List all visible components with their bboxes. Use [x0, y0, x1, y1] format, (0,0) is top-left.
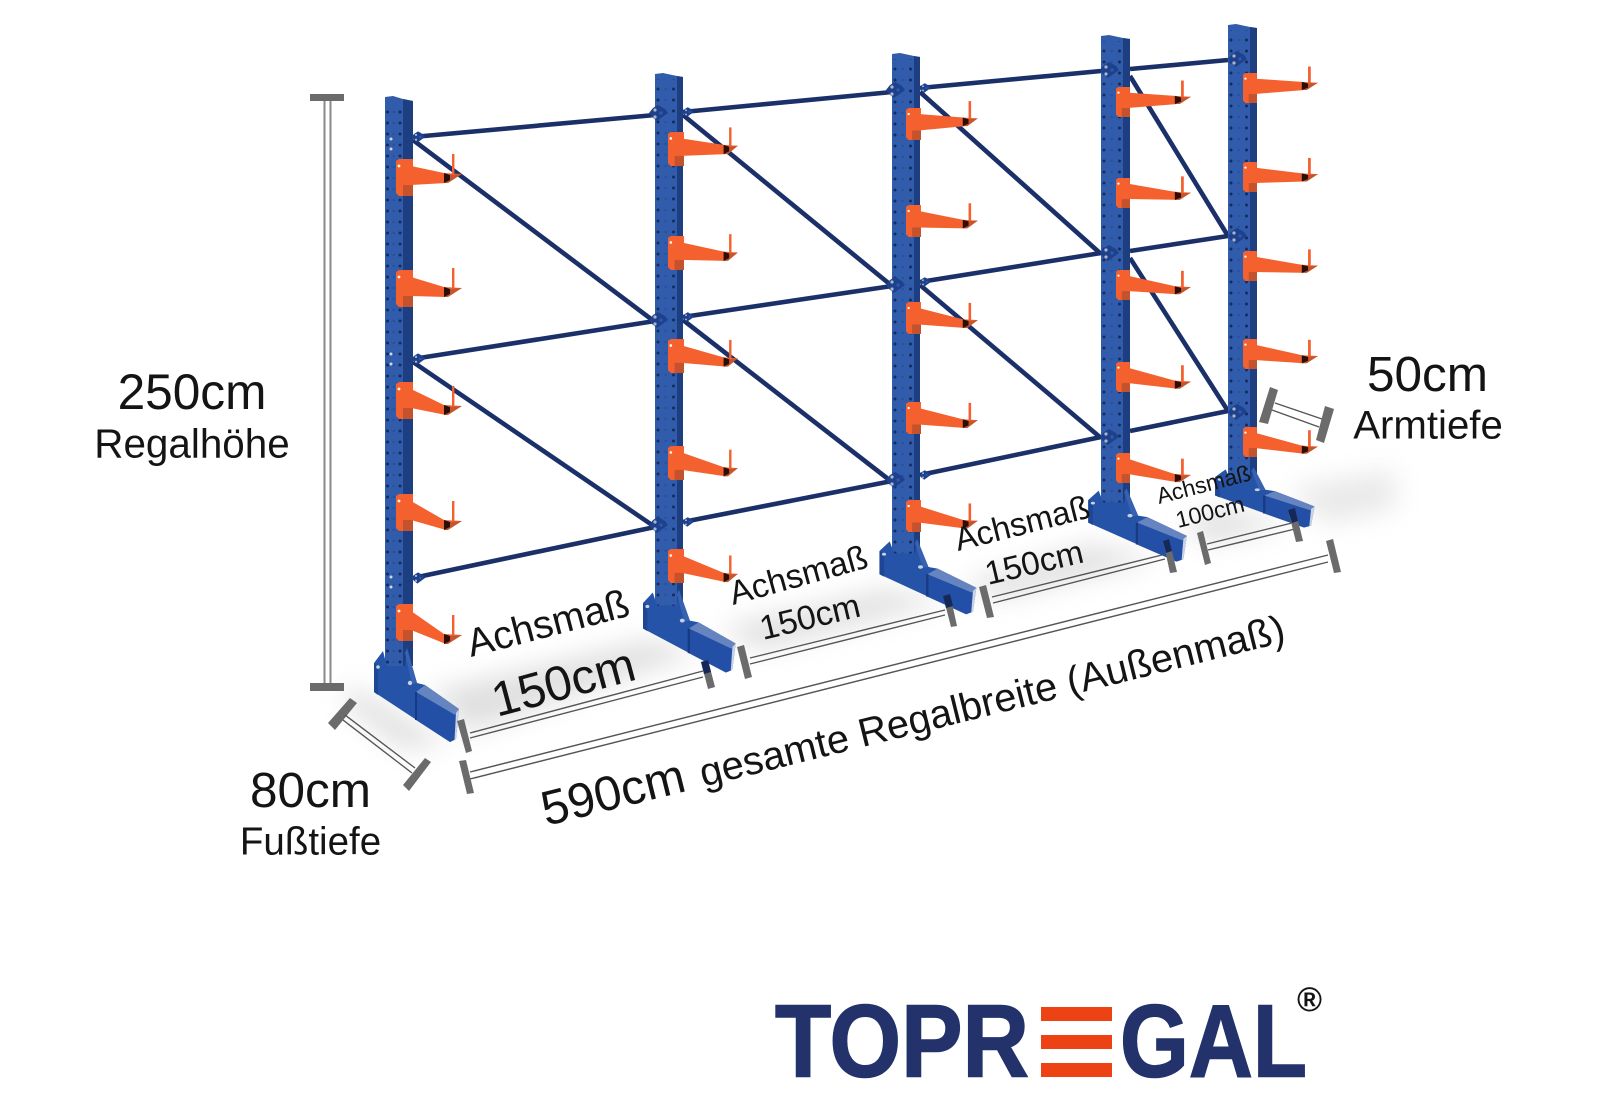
connectors 2 — [649, 105, 694, 533]
label: bay 3 Achsmaß 150cm — [951, 488, 1094, 592]
cantilever arms 5 — [1243, 67, 1318, 457]
column post 4 — [1101, 35, 1130, 503]
label: bay 2 Achsmaß 150cm — [725, 539, 872, 648]
foot 1 — [374, 648, 459, 742]
label: 80cm Fußtiefe — [240, 763, 381, 864]
upright 4 — [1088, 35, 1191, 562]
foot 4 — [1088, 488, 1187, 562]
logo: stylised E bars — [1041, 1007, 1112, 1077]
connectors 5 — [1228, 51, 1247, 420]
label: 80cm Fußtiefe: 80cm — [250, 763, 371, 818]
floor shadows — [345, 470, 1395, 748]
logo: TOPREGAL: GAL — [1120, 984, 1307, 1098]
cantilever arms 4 — [1116, 81, 1191, 483]
dimension: overall width — [459, 539, 1341, 794]
connectors 1 — [412, 131, 425, 584]
label: bay 1 Achsmaß 150cm — [462, 581, 641, 728]
label: 250cm Regalhöhe: 250cm — [118, 364, 266, 420]
dimension: height 250cm — [310, 94, 344, 691]
upright 1 — [374, 96, 462, 742]
logo: TOPREGAL: TOPR — [775, 984, 1029, 1098]
dimension: bay 3 — [979, 539, 1177, 618]
column post 2 — [655, 73, 683, 606]
label: 250cm Regalhöhe — [94, 364, 290, 466]
label: 250cm Regalhöhe: Regalhöhe — [94, 420, 290, 466]
label: 80cm Fußtiefe: Fußtiefe — [240, 820, 381, 864]
connectors 4 — [1100, 62, 1119, 445]
logo: TOPREGAL: ® — [1297, 981, 1322, 1019]
upright 2 — [643, 73, 738, 673]
column post 5 — [1228, 24, 1257, 480]
dimension: foot depth 80cm — [328, 698, 431, 791]
upright 5 — [1215, 24, 1318, 528]
label: bay 1 Achsmaß 150cm: Achsmaß — [462, 581, 634, 666]
dimension: bay 1 — [457, 660, 715, 753]
label: bay 4 Achsmaß 100cm: 100cm — [1173, 491, 1247, 533]
logo: TOPREGAL — [775, 981, 1322, 1098]
label: bay 3 Achsmaß 150cm: 150cm — [981, 533, 1087, 592]
label: bay 2 Achsmaß 150cm: 150cm — [756, 587, 864, 648]
foot 5 — [1215, 467, 1315, 528]
column post 1 — [385, 96, 413, 666]
label: 50cm Armtiefe — [1353, 347, 1503, 448]
dimension: arm depth 50cm — [1259, 387, 1334, 443]
column post 3 — [892, 53, 920, 554]
label: bay 4 Achsmaß 100cm: Achsmaß — [1154, 460, 1253, 509]
cantilever arms 3 — [906, 101, 978, 532]
label: 590cm overall width: 590cmgesamte Regalbreite (Außenmaß) — [536, 600, 1290, 837]
dimension: bay 2 — [737, 594, 957, 679]
cantilever arms 1 — [396, 154, 462, 644]
label: 50cm Armtiefe: 50cm — [1367, 347, 1488, 402]
bracing rods: horizontal and diagonal — [413, 60, 1228, 578]
label: bay 1 Achsmaß 150cm: 150cm — [486, 638, 641, 728]
label: bay 3 Achsmaß 150cm: Achsmaß — [951, 488, 1094, 558]
upright 3 — [879, 53, 978, 614]
connectors 3 — [886, 82, 931, 488]
dimension: bay 4 — [1197, 508, 1303, 565]
cantilever arms 2 — [668, 127, 738, 583]
label: bay 2 Achsmaß 150cm: Achsmaß — [725, 539, 872, 613]
label: 50cm Armtiefe: Armtiefe — [1353, 402, 1503, 448]
foot 3 — [879, 539, 976, 614]
foot 2 — [643, 590, 736, 673]
label: bay 4 Achsmaß 100cm — [1154, 460, 1253, 533]
